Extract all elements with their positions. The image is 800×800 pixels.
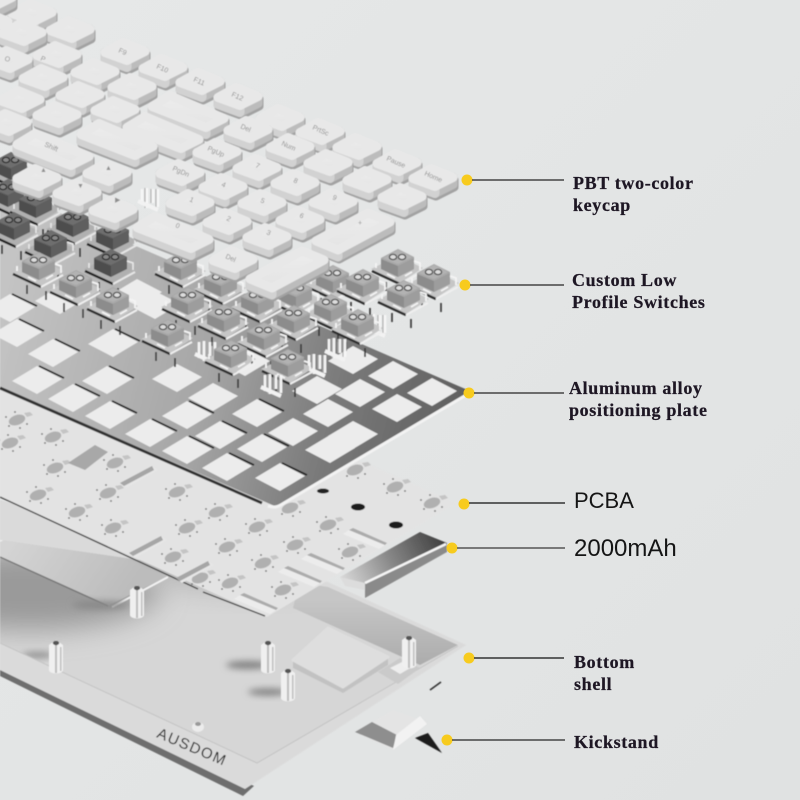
keycap legends: Num (280, 140, 297, 153)
keycap legends: F10 (155, 63, 169, 75)
callout: switches: Profile Switches (572, 292, 706, 312)
keycap legends: Del (224, 253, 237, 264)
keycap legends: ▲ (105, 165, 112, 172)
callout: kickstand: Kickstand (574, 732, 659, 752)
keycap legends (3, 47, 443, 264)
callout: battery (446, 535, 677, 562)
callout: keycap (462, 173, 694, 215)
keycap legends: 8 (292, 177, 299, 185)
callout: bottom shell: shell (574, 674, 612, 694)
AUSDOM logo: AUSDOM (154, 725, 229, 770)
plate switch cut-outs (0, 279, 457, 491)
keycap legends: + (358, 220, 362, 227)
callout: kickstand (442, 732, 659, 752)
keycap legends: PgUp (206, 145, 225, 159)
keycap legends: 0 (174, 222, 181, 230)
keycap legends: PrtSc (311, 124, 330, 138)
keycap legends: F12 (230, 91, 244, 103)
callout: bottom shell: Bottom (574, 652, 635, 672)
board cut-outs (0, 411, 448, 614)
keycaps (0, 0, 454, 297)
keycap legends: ▲ (40, 167, 47, 174)
callout: switches (460, 270, 706, 312)
keycap legends: F11 (192, 76, 206, 88)
keycap legends: Pause (385, 155, 406, 170)
artwork: exploded keyboard (0, 0, 470, 796)
keycap legends: 4 (220, 181, 227, 189)
keycap legends: Home (423, 170, 443, 184)
keycap legends: 7 (254, 162, 261, 170)
callout: plate: positioning plate (569, 400, 708, 420)
battery (340, 532, 447, 598)
keycap legends: PgDn (171, 165, 190, 179)
callout: PCBA (458, 488, 634, 513)
positioning plate (0, 187, 470, 507)
keycap legends: ▼ (77, 183, 84, 190)
shell floor shading (0, 522, 458, 696)
callout: switches: Custom Low (572, 270, 677, 290)
kickstand (355, 710, 442, 753)
connector block (378, 658, 420, 684)
keycap legends: 2 (225, 215, 232, 223)
bottom shell (0, 500, 466, 796)
callout: bottom shell (464, 652, 635, 694)
keycap legends: F9 (117, 47, 128, 57)
posts (49, 585, 416, 732)
keycap legends: O (3, 55, 12, 64)
keycap legends: 1 (188, 196, 195, 204)
light switches (right cluster) (138, 188, 459, 397)
PCBA board (0, 370, 457, 617)
keycap legends: Shift (43, 141, 59, 154)
keycap legends: 5 (259, 197, 266, 205)
callout: PCBA: PCBA (574, 488, 634, 513)
keycap legends: ▶ (115, 197, 121, 204)
keycap legends: 3 (265, 229, 272, 237)
callout: battery: 2000mAh (574, 535, 677, 562)
dark switches (left cluster) (0, 152, 138, 335)
battery pad (293, 628, 388, 693)
keycap legends: Del (239, 123, 252, 134)
callout: plate (464, 378, 708, 420)
keycap legends: 6 (298, 212, 305, 220)
callout: plate: Aluminum alloy (569, 378, 703, 398)
keycap legends: 9 (331, 194, 338, 202)
callout: keycap: keycap (573, 195, 631, 215)
keycap legends: P (39, 55, 47, 64)
callout: keycap: PBT two-color (573, 173, 694, 193)
